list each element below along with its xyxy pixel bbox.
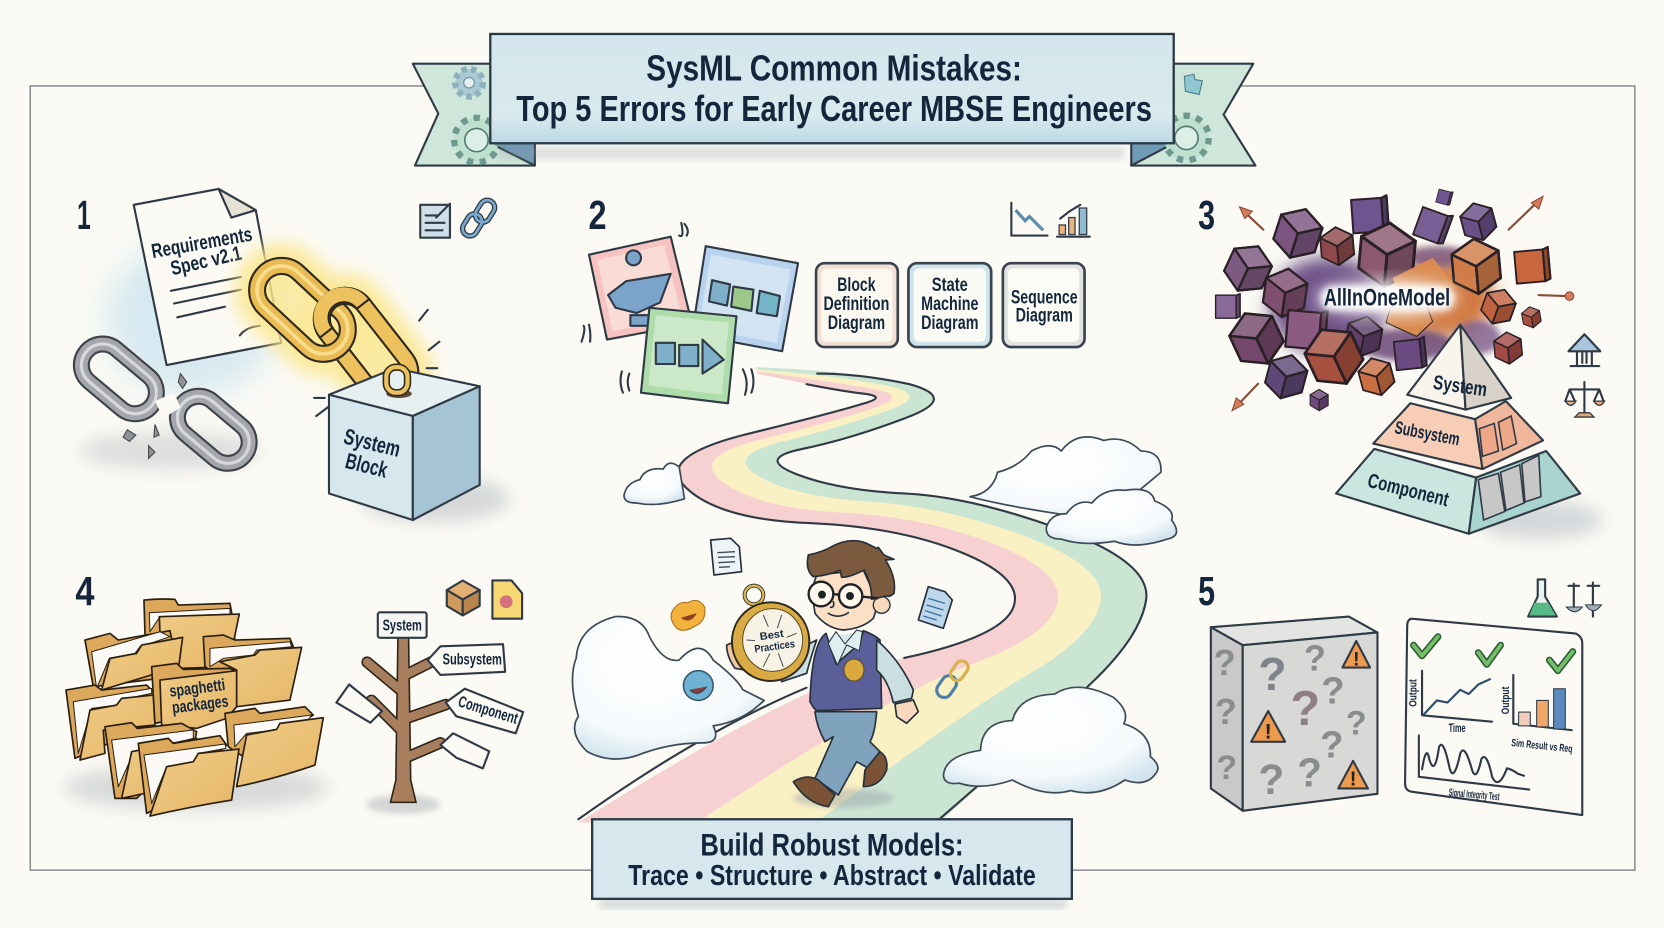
question marks: ? [1214, 642, 1236, 683]
block label: System [341, 424, 403, 462]
check marks fill [1414, 637, 1573, 671]
icon: blue smile [683, 671, 713, 700]
right shoe [863, 752, 887, 787]
bar chart [1500, 675, 1573, 755]
number 5: 5 [1198, 568, 1215, 614]
warning triangles: ! [1353, 649, 1359, 670]
explosion arrows [1232, 196, 1574, 411]
tier: system: System [1432, 372, 1488, 401]
shadow [793, 789, 893, 808]
broken chain [73, 335, 260, 472]
title line 2: Top 5 Errors for Early Career MBSE Engineers [516, 88, 1152, 129]
left arm [780, 640, 817, 682]
vest [810, 631, 882, 711]
warning triangles: ! [1350, 768, 1356, 790]
question marks: ? [1346, 704, 1367, 742]
cloud bottom right [943, 687, 1158, 793]
requirements document [134, 189, 281, 365]
question marks [1214, 638, 1367, 803]
icon: orange smile [671, 600, 705, 630]
footer panel [592, 819, 1072, 899]
banner panel [490, 34, 1174, 143]
compass [732, 586, 809, 681]
icon: balance scales [1565, 382, 1605, 417]
label: state machine diagram: State [932, 275, 968, 296]
face [812, 570, 878, 630]
icon: bars [1057, 205, 1090, 237]
block label: Block [343, 448, 391, 483]
hair [807, 541, 894, 599]
line chart: Time [1449, 722, 1466, 735]
folder: labelled [152, 663, 237, 728]
footer box [592, 819, 1072, 908]
golden chain [247, 256, 439, 416]
folder: right front [225, 707, 323, 787]
compass: Practices [754, 638, 796, 656]
card: blue block [692, 246, 798, 351]
icon: chain [460, 197, 497, 239]
folder: upper right [203, 635, 302, 707]
question marks: ? [1290, 682, 1320, 736]
block label [336, 424, 403, 485]
icon: test scales [1566, 583, 1601, 617]
mystery box [1211, 617, 1377, 811]
label: sequence diagram: Sequence [1011, 288, 1078, 309]
folder shadow [64, 764, 329, 811]
icon: floating chain [934, 658, 971, 700]
tier: component [1336, 449, 1580, 534]
label: sequence diagram: Diagram [1016, 306, 1073, 327]
cloud left large [572, 617, 764, 759]
card: green sequence [621, 308, 753, 403]
icon: yellow file [492, 580, 522, 619]
banner shadow [499, 146, 1125, 159]
question marks: ? [1216, 749, 1237, 787]
tier: subsystem [1373, 401, 1543, 469]
tier: subsystem: Subsystem [1393, 417, 1461, 449]
footer subtitle: Trace • Structure • Abstract • Validate [628, 860, 1036, 892]
folder: front [138, 736, 239, 816]
check marks [1414, 637, 1573, 671]
glasses [809, 582, 878, 608]
label: block definition diagram: Block [837, 275, 876, 296]
right ribbon tail [1131, 64, 1255, 166]
warning triangles: ! [1265, 721, 1272, 744]
number 1: 1 [77, 192, 91, 238]
icon: package [447, 580, 480, 616]
label: state machine diagram: Diagram [921, 313, 978, 334]
icon: hierarchy arrow [1568, 334, 1600, 366]
panel 5: unvalidated box vs dashboard [1198, 568, 1601, 815]
footer heading: Build Robust Models: [700, 826, 964, 862]
question marks: ? [1258, 756, 1284, 803]
road inner edge [578, 384, 1015, 819]
icon: document [420, 204, 450, 238]
ear [873, 597, 890, 613]
rainbow road [578, 367, 1146, 822]
label: block definition diagram: Diagram [828, 313, 885, 334]
question marks: ? [1304, 638, 1326, 679]
badge [844, 659, 864, 681]
central glow [1317, 282, 1457, 314]
compass: Best [759, 628, 785, 643]
validation dashboard [1405, 619, 1582, 815]
tag: system [378, 612, 427, 638]
right hand [895, 700, 918, 723]
icon: flask [1528, 579, 1557, 617]
card: red activity [582, 223, 692, 342]
title banner [413, 34, 1255, 166]
line chart: Output [1408, 679, 1420, 707]
bar chart: Sim Result vs Req [1511, 737, 1573, 755]
label: state machine diagram [908, 263, 991, 347]
label: block definition diagram: Definition [824, 294, 889, 315]
folder: left [66, 685, 155, 760]
folder: labelled: spaghetti [168, 675, 226, 701]
signal chart: Signal Integrity Test [1448, 787, 1500, 803]
road pink band [578, 371, 1058, 822]
label: sequence diagram [1003, 263, 1085, 347]
tag: subsystem [428, 644, 505, 675]
panel 3: all-in-one model vs hierarchy [1198, 188, 1605, 539]
warning triangles [1251, 641, 1370, 790]
icon: floating doc [711, 538, 742, 575]
folder: back [144, 599, 239, 670]
number 3: 3 [1198, 192, 1215, 238]
cloud top right back [970, 437, 1161, 520]
road outer edge [778, 374, 1146, 819]
number 2: 2 [588, 192, 606, 238]
folder: labelled: packages [171, 691, 230, 717]
label: state machine diagram: Machine [921, 294, 978, 315]
character with compass [711, 538, 952, 808]
tag: subsystem: Subsystem [443, 651, 502, 668]
floating extras [671, 600, 971, 700]
question marks: ? [1297, 749, 1322, 795]
tag: component: Component [456, 694, 520, 728]
panel 1: broken vs golden trace link [73, 189, 509, 522]
title line 1: SysML Common Mistakes: [646, 48, 1022, 89]
exploding cubes [1216, 188, 1551, 411]
line chart [1408, 671, 1492, 735]
panel 4: spaghetti packages vs tree [64, 568, 523, 816]
collar [828, 630, 862, 665]
tag: component [446, 689, 523, 733]
tier: component: Component [1365, 470, 1451, 511]
question marks: ? [1215, 691, 1237, 732]
road yellow band [578, 369, 1101, 822]
question marks: ? [1320, 724, 1344, 767]
chain glow [247, 256, 420, 405]
document title: Requirements [150, 224, 254, 263]
road green band [578, 367, 1146, 822]
question marks: ? [1321, 670, 1345, 713]
tag: blank left [336, 684, 382, 723]
signal chart [1419, 735, 1529, 803]
icon: floating blue doc [918, 587, 952, 628]
AllInOneModel label: AllInOneModel [1324, 285, 1450, 312]
smile [828, 602, 848, 616]
left ribbon tail [413, 64, 535, 166]
icon: declining chart [1011, 203, 1047, 236]
shirt [828, 632, 863, 667]
tree [336, 612, 523, 814]
label: block definition diagram [816, 263, 898, 347]
number 4: 4 [75, 568, 95, 614]
footer shadow [600, 900, 1067, 908]
cloud small left [624, 463, 684, 504]
right arm [877, 640, 913, 703]
folder: upper left [85, 631, 183, 690]
tag: system: System [383, 617, 422, 634]
pyramid [1336, 325, 1602, 539]
explosion blob [1269, 246, 1501, 361]
bar chart: Output [1500, 686, 1512, 714]
left hand [727, 642, 745, 670]
folder: middle front [105, 723, 197, 798]
tag: blank lower right [440, 733, 489, 768]
system block cube [329, 367, 509, 522]
cloud top right front [1046, 489, 1177, 545]
watercolor wash [106, 242, 276, 395]
left shoe [793, 777, 835, 807]
clouds [572, 437, 1177, 793]
tier: system [1407, 325, 1511, 410]
panel 2: diagram types [582, 192, 1090, 403]
central glow core [1321, 287, 1454, 310]
folder pile [66, 599, 323, 816]
legs [815, 712, 880, 795]
question marks: ? [1258, 648, 1287, 700]
document version: Spec v2.1 [169, 243, 244, 280]
